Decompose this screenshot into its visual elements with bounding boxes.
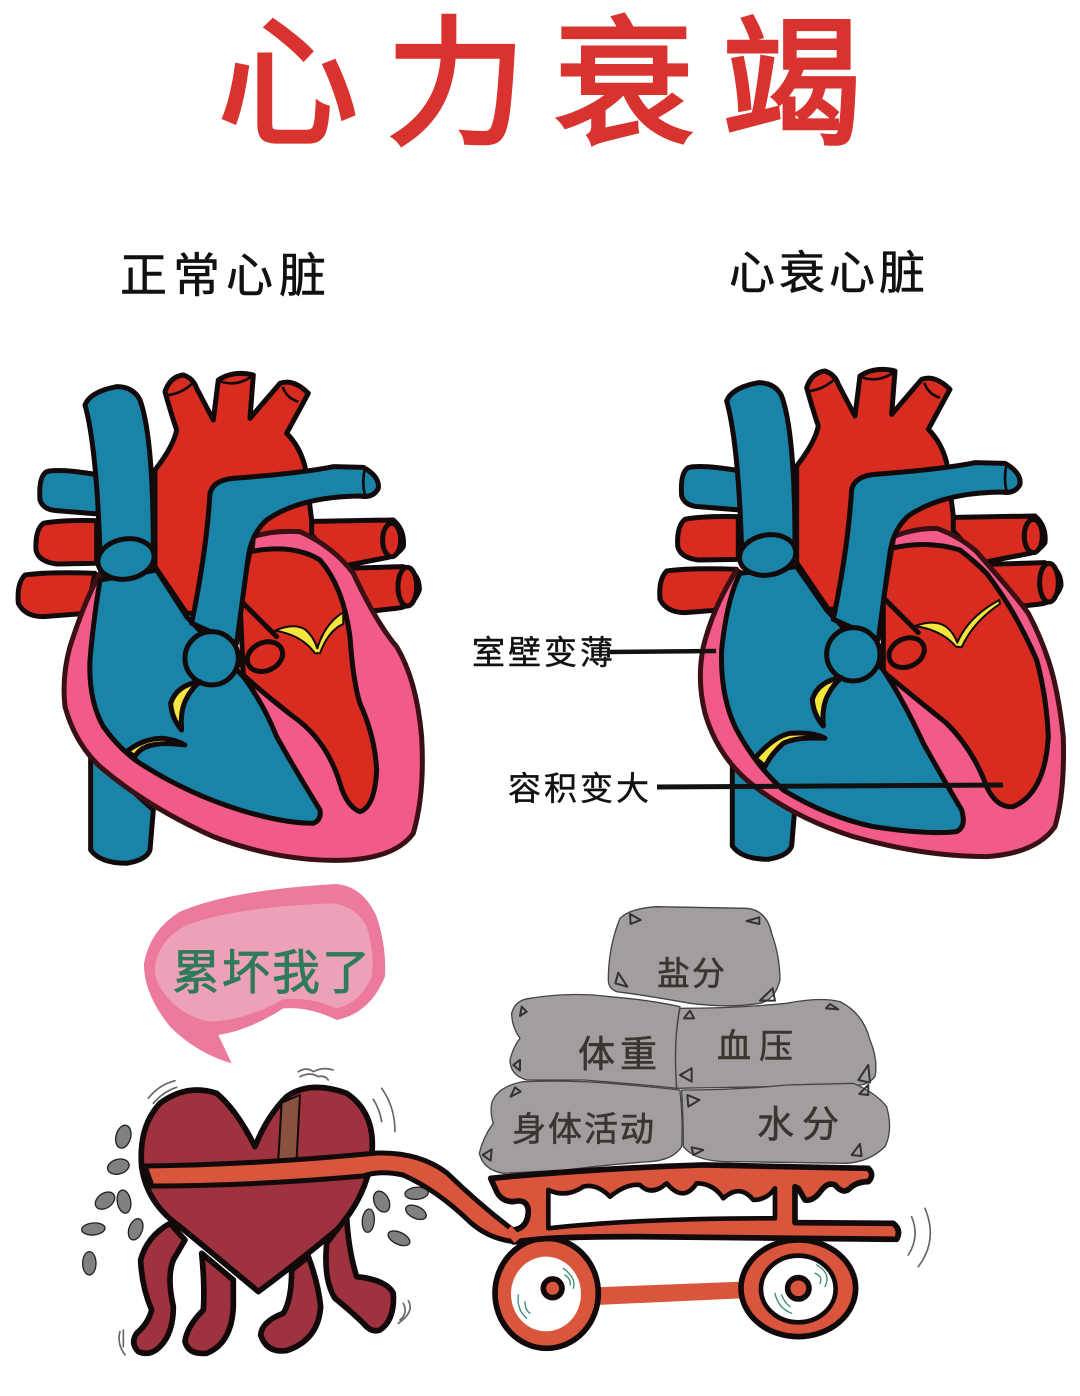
heading: failing heart: 心衰心脏: [729, 247, 929, 299]
sack label: salt: 盐分: [657, 955, 727, 992]
callout line: enlarged volume: [657, 785, 1003, 787]
sack: weight: [510, 995, 680, 1088]
sacks of load: [479, 907, 890, 1173]
sack label: blood pressure: 血压: [717, 1028, 801, 1066]
title: 心力衰竭: [218, 6, 890, 163]
pulling band: [145, 1153, 518, 1242]
brown stripe: [278, 1095, 300, 1160]
sack: salt: [608, 907, 780, 1006]
label: thinner wall: 室壁变薄: [472, 634, 616, 671]
left wheel: [495, 1238, 598, 1348]
sack label: weight: 体重: [578, 1034, 662, 1075]
cart frame opening: [548, 1183, 775, 1228]
sack: blood pressure: [676, 1000, 876, 1088]
sack corners: [483, 914, 870, 1161]
heading: normal heart: 正常心脏: [120, 249, 332, 302]
motion lines outer: [918, 1208, 930, 1267]
diagram: normal heart: [18, 373, 422, 863]
heart legs: [134, 1217, 393, 1353]
cart axle: [597, 1282, 743, 1305]
cart: [491, 1165, 930, 1348]
motion lines: [908, 1217, 915, 1255]
sack label: water: 水分: [757, 1104, 847, 1145]
shake lines: [119, 1069, 410, 1355]
sack: water: [682, 1083, 890, 1163]
sack: physical activity: [479, 1081, 682, 1173]
heart body: [141, 1087, 372, 1292]
sack label: physical activity: 身体活动: [512, 1111, 656, 1149]
sweat drops: [81, 1123, 429, 1275]
speech bubble: [144, 884, 385, 1063]
callout line: thinner wall: [610, 651, 716, 652]
label: enlarged volume: 容积变大: [508, 770, 652, 807]
cart frame: [491, 1165, 898, 1242]
diagram: failing heart: [660, 369, 1064, 859]
tired heart character: [81, 1069, 429, 1355]
speech bubble: 累坏我了: [172, 947, 372, 1000]
right wheel: [741, 1240, 856, 1337]
